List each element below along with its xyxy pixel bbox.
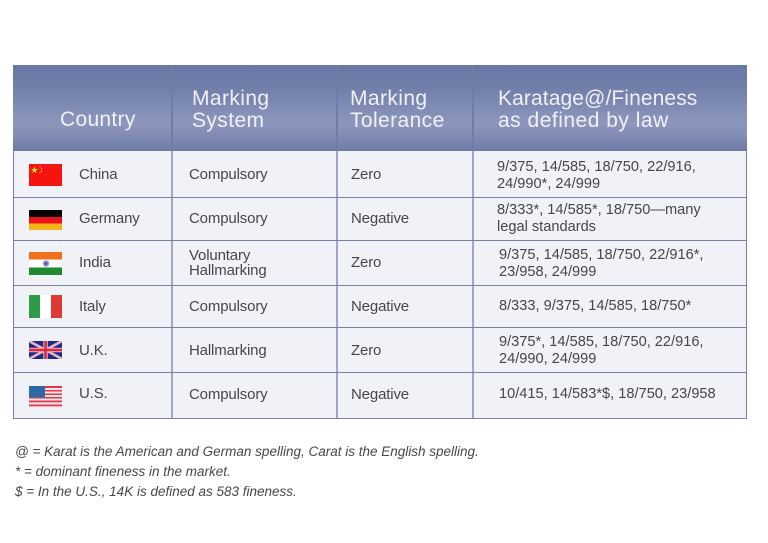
footnote: US 14K: $ = In the U.S., 14K is defined as 583 fineness.: [15, 484, 297, 499]
heading: Marking System: System: [192, 109, 264, 132]
China fineness: 9/375, 14/585, 18/750, 22/916,: [497, 159, 696, 175]
icon: Italy flag: [29, 295, 62, 318]
US marking system: Compulsory: [189, 386, 268, 403]
Germany fineness: [497, 202, 701, 234]
UK fineness: 9/375*, 14/585, 18/750, 22/916,: [499, 334, 704, 350]
India fineness: [499, 247, 704, 280]
footnote: karat spelling: @ = Karat is the American and German spelling, Carat is the English spelling.: [15, 444, 479, 459]
China fineness: 24/990*, 24/999: [497, 176, 600, 192]
UK row label: U.K.: [79, 342, 108, 359]
India marking system: Voluntary: [189, 247, 250, 264]
icon: Germany flag: [29, 210, 62, 230]
UK fineness: [499, 334, 704, 366]
India tolerance: Zero: [351, 254, 381, 271]
icon: China flag: [29, 164, 62, 186]
UK fineness: 24/990, 24/999: [499, 350, 596, 366]
Italy row label: Italy: [79, 298, 106, 315]
UK tolerance: Zero: [351, 342, 381, 359]
icon: India flag: [29, 252, 62, 275]
China row label: China: [79, 166, 117, 183]
heading: Marking Tolerance: Marking: [350, 87, 428, 110]
icon: US flag: [29, 386, 62, 408]
China fineness: [497, 159, 696, 192]
UK marking system: Hallmarking: [189, 342, 267, 359]
Germany fineness: 8/333*, 14/585*, 18/750—many: [497, 202, 701, 218]
Germany fineness: legal standards: [497, 218, 596, 234]
table header band: [13, 65, 747, 151]
heading: Country: Country: [60, 108, 136, 131]
heading: Marking Tolerance: [350, 87, 445, 132]
heading: Karatage/Fineness: as defined by law: [498, 109, 669, 132]
Italy marking system: Compulsory: [189, 298, 268, 315]
heading: Marking System: Marking: [192, 87, 270, 110]
US tolerance: Negative: [351, 386, 409, 403]
heading: Marking System: [192, 87, 270, 132]
Germany row label: Germany: [79, 210, 140, 227]
US row label: U.S.: [79, 385, 108, 402]
China marking system: Compulsory: [189, 166, 268, 183]
Italy fineness: 8/333, 9/375, 14/585, 18/750*: [499, 298, 691, 314]
footnotes: [15, 444, 479, 499]
Germany tolerance: Negative: [351, 210, 409, 227]
heading: Karatage/Fineness: Karatage@/Fineness: [498, 87, 697, 110]
China tolerance: Zero: [351, 166, 381, 183]
India marking system: [189, 247, 267, 279]
icon: UK flag: [29, 341, 62, 359]
heading: Marking Tolerance: Tolerance: [350, 109, 445, 132]
Germany marking system: Compulsory: [189, 210, 268, 227]
India row label: India: [79, 254, 111, 271]
India fineness: 9/375, 14/585, 18/750, 22/916*,: [499, 247, 704, 263]
table panel: [13, 65, 747, 419]
heading: Karatage/Fineness: [498, 87, 697, 132]
Italy tolerance: Negative: [351, 298, 409, 315]
India fineness: 23/958, 24/999: [499, 264, 596, 280]
US fineness: 10/415, 14/583*$, 18/750, 23/958: [499, 386, 716, 402]
footnote: dominant fineness: * = dominant fineness in the market.: [15, 464, 231, 479]
India marking system: Hallmarking: [189, 262, 267, 279]
